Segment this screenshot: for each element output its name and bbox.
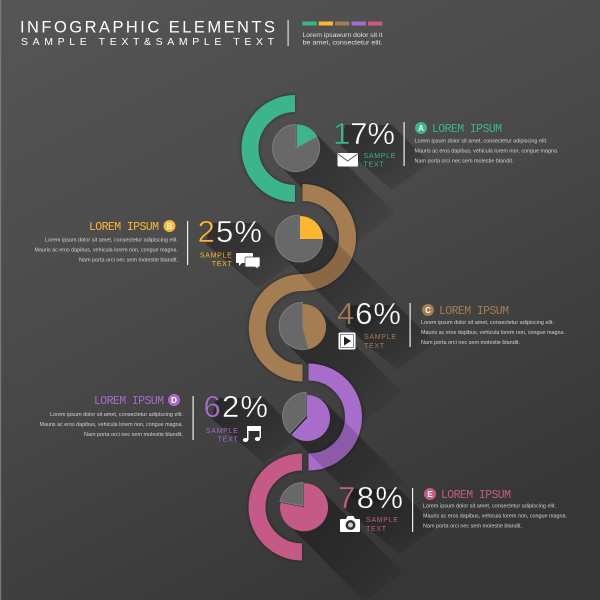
sample text label: SAMPLE: [364, 153, 396, 160]
body B: Nam porta orci nec sem molestie blandit.: [79, 258, 178, 264]
legend text: Lorem ipsawurn dolor sit it: [302, 32, 383, 39]
pie A 17%: [273, 124, 320, 171]
pie B 25%: [276, 215, 323, 262]
heading C: LOREM IPSUM: [439, 305, 509, 318]
divider: [412, 488, 413, 532]
percent 25: 25%: [198, 214, 262, 249]
body B: Mauris ac eros dapibus, vehicula lorem non, congue magna.: [34, 248, 178, 254]
percent 46: 46%: [337, 296, 401, 331]
sample text label: TEXT: [366, 526, 387, 533]
icon: play: [338, 332, 356, 350]
section C: [279, 296, 565, 350]
section D: [40, 389, 330, 444]
body D: Mauris ac eros dapibus, vehicula lorem non, congue magna.: [40, 422, 183, 428]
heading D: LOREM IPSUM: [94, 395, 164, 408]
ring: pink: [257, 462, 302, 552]
badge B: B: [167, 222, 173, 231]
badge D: [168, 394, 180, 406]
badge E: E: [427, 490, 433, 499]
section A: [273, 116, 559, 171]
sample text label: TEXT: [218, 436, 239, 444]
sample text label: SAMPLE: [206, 428, 238, 435]
ring: green: [250, 104, 295, 194]
pie C 46%: [279, 302, 326, 349]
title block: [20, 18, 275, 48]
long shadows: [206, 125, 437, 600]
body A: Nam porta orci nec sem molestie blandit.: [414, 158, 514, 164]
percent 62: 62%: [204, 389, 268, 424]
heading E: LOREM IPSUM: [441, 489, 511, 502]
body C: Mauris ac eros dapibus, vehicula lorem non, congue magna.: [421, 330, 565, 336]
body E: Nam porta orci nec sem molestie blandit.: [423, 524, 522, 530]
icon: chat bubbles: [236, 253, 260, 269]
title: INFOGRAPHIC ELEMENTS: [20, 18, 275, 36]
ring shadows: [250, 104, 354, 552]
icon: camera: [340, 516, 360, 532]
legend colour bars: [302, 22, 382, 26]
body D: Lorem ipsum dolor sit amet, consectetur adipiscing elit.: [50, 412, 183, 418]
icon: music notes: [243, 426, 261, 442]
icon: envelope: [338, 153, 358, 166]
percent 78: 78%: [338, 480, 403, 515]
body C: [421, 320, 565, 346]
body C: Lorem ipsum dolor sit amet, consectetur adipiscing elit.: [421, 320, 554, 326]
legend text line 2: be amet, consectetur elit.: [302, 40, 383, 46]
body B: [34, 238, 178, 264]
badge B: [164, 220, 176, 232]
body E: [423, 504, 567, 530]
sample text label: SAMPLE: [366, 517, 399, 524]
section E: [280, 480, 567, 533]
body B: Lorem ipsum dolor sit amet, consectetur adipiscing elit.: [45, 238, 178, 244]
body D: [40, 412, 183, 438]
badge E: [424, 488, 436, 500]
body A: [414, 138, 559, 164]
pie D 62%: [283, 392, 330, 441]
body D: Nam porta orci nec sem molestie blandit.: [84, 432, 183, 438]
sample text label: SAMPLE: [200, 252, 232, 260]
body E: Lorem ipsum dolor sit amet, consectetur adipiscing elit.: [423, 504, 556, 510]
header divider and legend: [288, 20, 383, 46]
body E: Mauris ac eros dapibus, vehicula lorem non, congue magna.: [423, 514, 567, 520]
sample text label: TEXT: [364, 162, 384, 168]
ring: purple: [308, 372, 354, 462]
divider: [192, 396, 194, 440]
subtitle: SAMPLE TEXT&SAMPLE TEXT: [21, 36, 275, 48]
sample text label: SAMPLE: [364, 334, 397, 341]
shading on rings: [302, 192, 354, 462]
sample text label: TEXT: [212, 261, 233, 268]
divider: [187, 221, 188, 265]
badge D: D: [171, 396, 177, 405]
badge C: [422, 304, 434, 316]
ring: brown S-curve: [257, 192, 348, 373]
pie E 78%: [280, 482, 328, 531]
badge C: C: [425, 306, 431, 315]
heading B: LOREM IPSUM: [89, 221, 159, 234]
divider: [404, 122, 405, 166]
body C: Nam porta orci nec sem molestie blandit.: [421, 340, 520, 346]
body A: Mauris ac eros dapibus, vehicula lorem non, congue magna.: [414, 148, 559, 154]
section B: [34, 214, 323, 269]
divider: [410, 303, 411, 347]
body A: Lorem ipsum dolor sit amet, consectetur adipiscing elit.: [414, 138, 548, 144]
badge A: A: [418, 124, 424, 133]
percent 17: 17%: [333, 116, 395, 151]
sample text label: TEXT: [364, 343, 385, 350]
heading A: LOREM IPSUM: [432, 123, 502, 136]
badge A: [415, 122, 427, 134]
